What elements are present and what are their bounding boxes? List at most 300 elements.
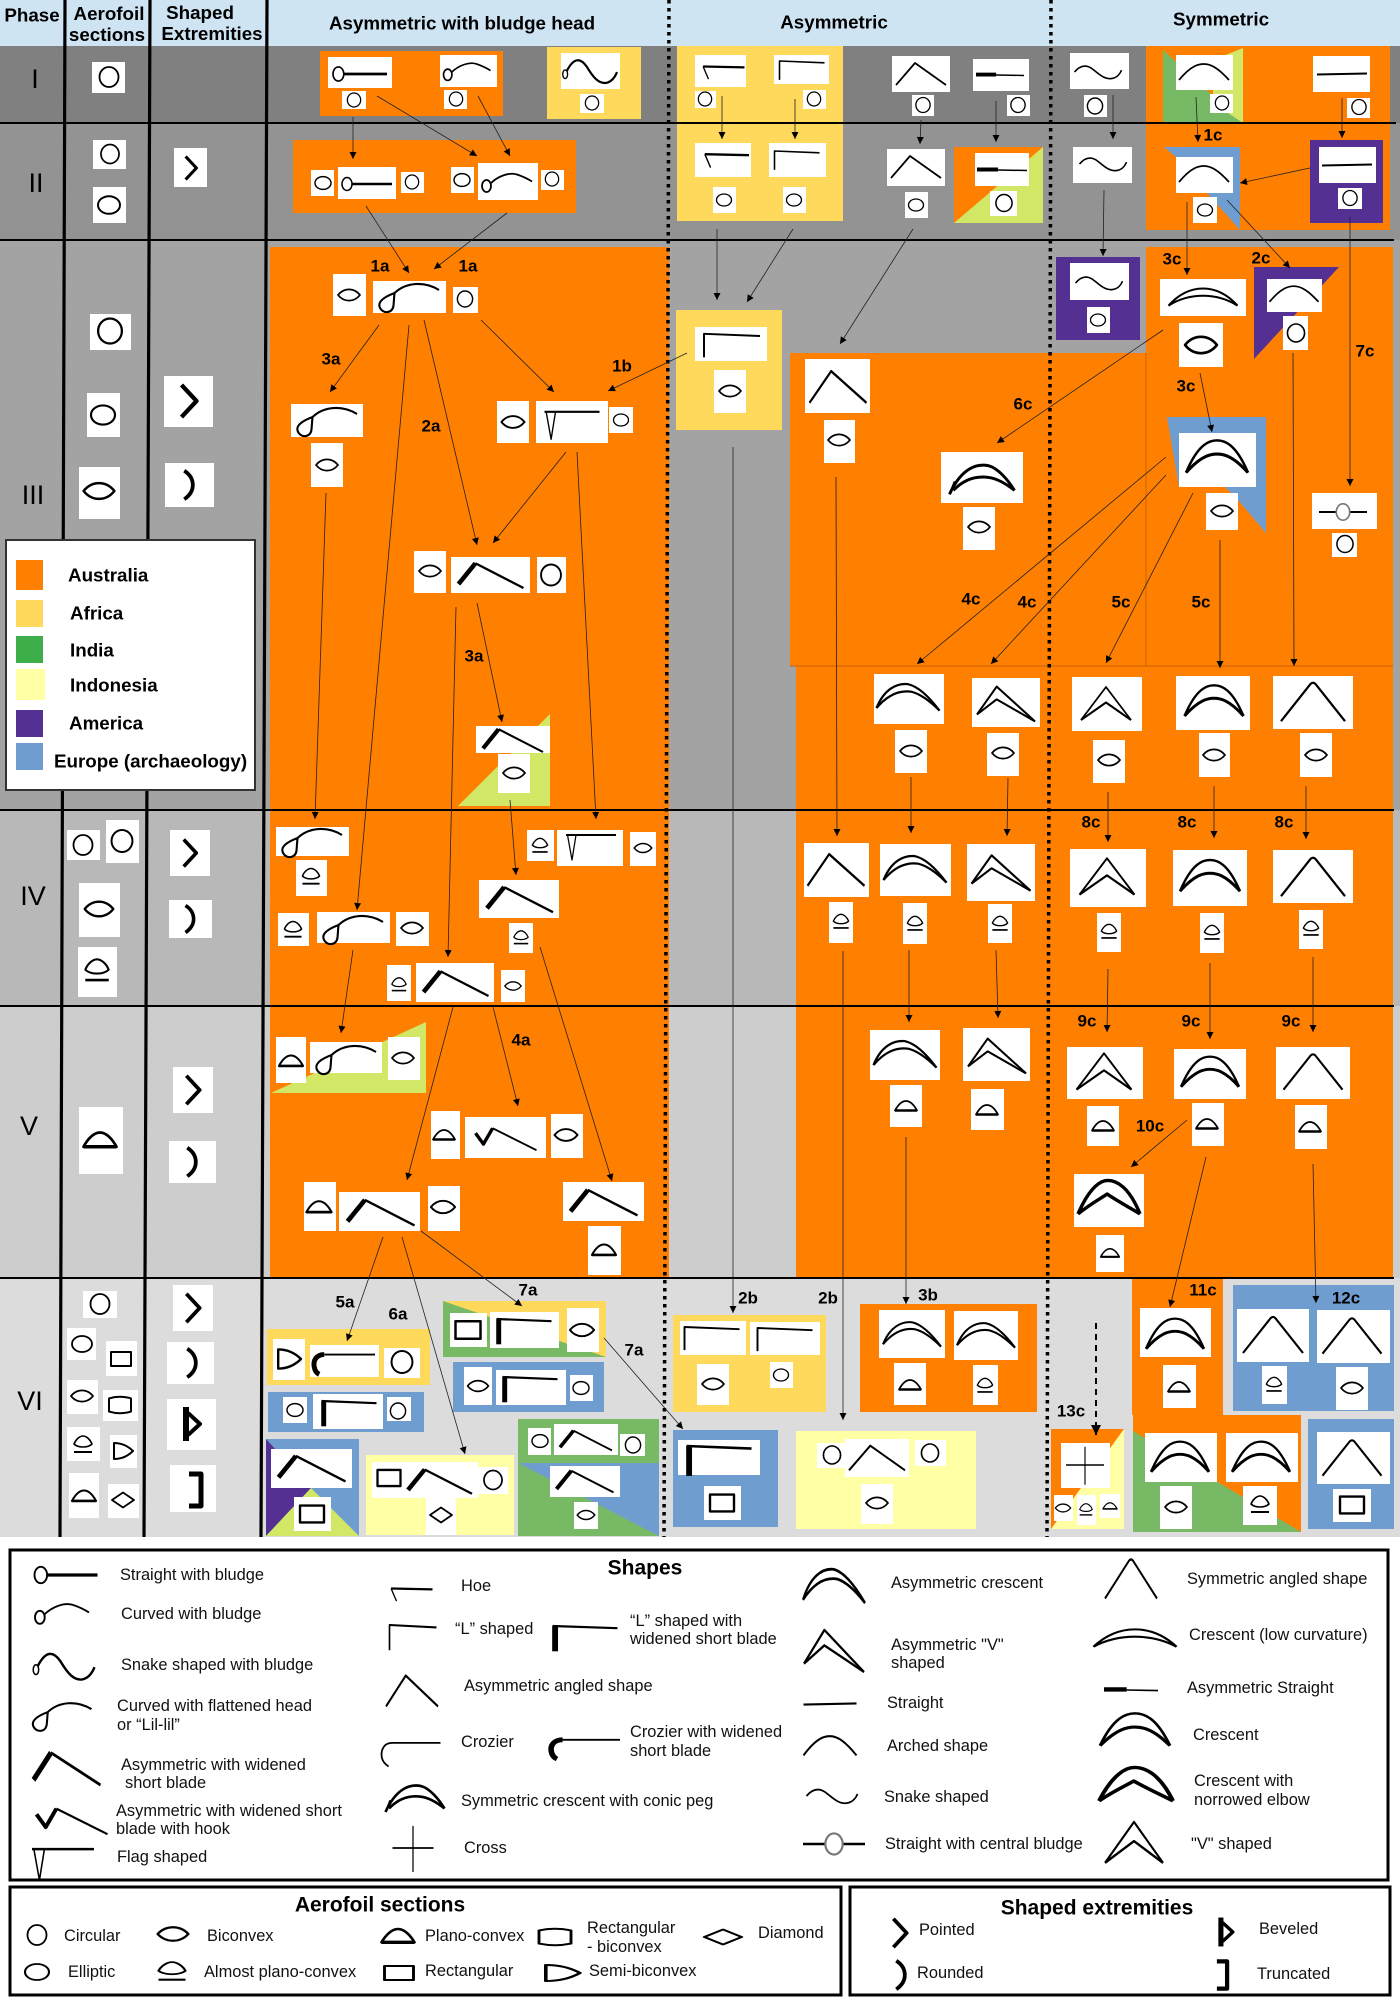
arrow (794, 99, 796, 139)
step label 6c: 6c (1014, 394, 1032, 414)
artefact: asymmetric crescent, phase V (870, 1030, 940, 1127)
artefact: asymmetric widened, phase III (414, 551, 566, 593)
key: symmetric crescent with conic peg: Symmetric crescent with conic peg (461, 1792, 713, 1810)
arrow (341, 950, 353, 1033)
key: V shaped: "V" shaped (1191, 1835, 1272, 1853)
arrow: 3c (1200, 373, 1212, 432)
step label 9c: 9c (1282, 1012, 1300, 1030)
key: circular: Circular (64, 1927, 121, 1945)
arrow: 9c (1107, 969, 1108, 1032)
key: crescent: Crescent (1193, 1726, 1259, 1744)
artefact: L widened, phase VI Europe centre (678, 1440, 760, 1520)
panel: Australia phases III-V, bludge column (270, 247, 669, 1278)
artefact: cross, phase VI (1054, 1443, 1120, 1525)
key: pointed (893, 1919, 975, 1947)
panel: Australia phases I-II, symmetric column (1146, 46, 1390, 230)
panel: Europe, phase VI L widened (268, 1392, 424, 1432)
arrow (478, 96, 510, 156)
artefact: V shaped, phase III (1072, 677, 1142, 783)
key: semi-biconvex: Semi-biconvex (589, 1962, 697, 1980)
heading: Symmetric: Symmetric (1173, 8, 1269, 30)
step label 3a: 3a (465, 646, 484, 666)
artefact: arched, phase III America (1267, 279, 1322, 350)
artefact: lil-lil, phase IV left (276, 827, 349, 896)
step label 3c: 3c (1163, 250, 1181, 268)
key: L shaped with widened short blade: widened short blade (629, 1630, 777, 1648)
artefact: symmetric crescent with conic peg, phase III (941, 452, 1023, 550)
artefact: crescent, phase VI India left (1145, 1433, 1217, 1529)
step label 5c: 5c (1192, 592, 1210, 612)
arrow: 7a (421, 1231, 522, 1306)
shaped extremities, phase IV (169, 830, 212, 938)
legend item: India: India (70, 640, 114, 660)
artefact: snake with bludge, phase I (561, 53, 620, 113)
artefact: asymmetric widened, phase VI Indonesia (372, 1462, 508, 1535)
aerofoil sections, phase I (92, 62, 125, 93)
panel: Australia phases III-V, asymmetric and symmetric columns (790, 247, 1393, 1278)
key: asymmetric V shaped: Asymmetric "V" (891, 1636, 1004, 1654)
step label 1a: 1a (459, 256, 478, 276)
arrow: 7c (1349, 217, 1351, 486)
artefact: asymmetric crescent, phase VI right (954, 1311, 1018, 1405)
key: asymmetric angled shape (386, 1676, 653, 1706)
panel: Europe, phase VI L widened third (673, 1430, 778, 1527)
arrow: 1c (1196, 97, 1198, 142)
panel: Europe, phase VI L widened second (453, 1362, 604, 1412)
artefact: flag, phase III 1b (497, 401, 633, 443)
step label 3c: 3c (1177, 376, 1195, 396)
key: crescent (1100, 1713, 1259, 1746)
artefact: crescent low curvature, phase III (1160, 279, 1246, 367)
key: asymmetric with widened short blade (34, 1753, 306, 1792)
key: crozier (382, 1733, 514, 1767)
row background: phase III (0, 240, 1400, 810)
arrow: 8c (1213, 786, 1215, 838)
arrow: 2c (1227, 200, 1290, 268)
artefact: crescent, phase IV (1173, 850, 1247, 953)
key: curved with bludge (35, 1604, 261, 1624)
panel: Europe, phase III crescent (1167, 417, 1266, 533)
arrow (996, 950, 998, 1018)
artefact: curved with bludge, phase II (451, 163, 564, 200)
arrow: 5c (1106, 493, 1193, 663)
artefact: asymmetric straight, phase II (975, 153, 1029, 216)
arrow (716, 229, 718, 300)
artefact: symmetric angled, phase VI 12c right (1317, 1310, 1390, 1410)
artefact: asymmetric with hook, phase V (431, 1111, 583, 1159)
key: hoe (391, 1577, 491, 1601)
key: crozier with widened short blade: Crozier with widened (630, 1723, 782, 1741)
arrow: 7a (604, 1338, 683, 1429)
artefact: crescent, phase VI India right (1226, 1433, 1298, 1525)
panel: America, phase III arched (1254, 267, 1339, 359)
key: rectangular-biconvex: Rectangular (587, 1919, 676, 1937)
heading: Asymmetric: Asymmetric (780, 12, 888, 32)
row background: phase II (0, 123, 1400, 240)
artefact: lil-lil, phase III 1a (333, 274, 478, 316)
phase label VI: VI (17, 1386, 43, 1416)
shaped extremities, phase II (174, 148, 207, 187)
key: crozier with widened short blade (551, 1723, 782, 1760)
key: rectangular (384, 1962, 514, 1980)
artefact: asymmetric V, phase IV (967, 844, 1035, 943)
panel: lime, phase III angled (458, 714, 550, 806)
arrow (1240, 168, 1310, 183)
key: snake shaped (806, 1788, 989, 1806)
key: rounded: Rounded (917, 1964, 984, 1982)
step label 3a: 3a (322, 350, 341, 368)
key: asymmetric angled shape: Asymmetric angled shape (464, 1677, 653, 1695)
key: curved with bludge: Curved with bludge (121, 1605, 261, 1623)
artefact: curved with bludge, phase I (440, 55, 497, 109)
artefact: asymmetric V, phase III (972, 678, 1040, 776)
artefact: asymmetric widened, phase IV right (479, 880, 559, 953)
step label 8c: 8c (1275, 812, 1293, 832)
legend item: Australia: Australia (68, 564, 149, 586)
artefact: asymmetric straight, phase I (973, 59, 1030, 116)
arrow: 2a (357, 325, 409, 910)
artefact: L shaped, phase III Africa (695, 327, 767, 413)
key: asymmetric V shaped: shaped (891, 1654, 945, 1672)
key: rectangular-biconvex (539, 1919, 676, 1956)
arrow: 1a (434, 213, 507, 269)
key: beveled (1221, 1918, 1318, 1946)
artefact: symmetric angled, phase V (1276, 1047, 1350, 1149)
arrow: 8c (1107, 792, 1109, 842)
legend: regions (6, 540, 255, 790)
artefact: V shaped, phase V (1067, 1047, 1143, 1146)
arrow: 3a (330, 325, 379, 392)
arrow: 6c (997, 330, 1163, 443)
arrow: 12c (1313, 1164, 1316, 1303)
artefact: snake, phase II (1073, 147, 1132, 183)
key: rectangular-biconvex: - biconvex (587, 1938, 663, 1956)
arrow (747, 229, 793, 302)
arrow (1112, 95, 1114, 139)
step label 5a: 5a (336, 1292, 355, 1312)
key: diamond (704, 1924, 824, 1944)
step label 2b: 2b (818, 1288, 838, 1308)
arrow (840, 229, 913, 344)
key: curved with flattened head (33, 1697, 312, 1734)
heading: Shaped Extremities: Extremities (161, 22, 263, 44)
arrow: 9c (1209, 963, 1211, 1039)
artefact: crescent, phase III (1176, 676, 1250, 777)
key: symmetric crescent with conic peg (386, 1786, 713, 1812)
artefact: L widened, phase VI Africa-India (450, 1308, 599, 1352)
artefact: L shaped, phase VI Africa left (680, 1321, 746, 1405)
artefact: asymmetric widened, phase VI America-Europe (271, 1449, 352, 1531)
arrow (908, 950, 910, 1022)
key: biconvex: Biconvex (207, 1927, 274, 1945)
panel: Europe, America and lime, phase VI (266, 1439, 359, 1536)
key: elliptic (25, 1963, 115, 1981)
step label 9c: 9c (1078, 1012, 1096, 1030)
arrow: 1a (366, 206, 409, 273)
phase label IV: IV (20, 881, 46, 911)
artefact: asymmetric crescent, phase IV (880, 844, 951, 944)
arrow: 4c (917, 457, 1166, 664)
arrow (836, 477, 837, 836)
artefact: crozier widened, phase VI Africa (273, 1339, 420, 1380)
phase label V: V (20, 1111, 38, 1141)
column divider lines (60, 0, 267, 1537)
arrow (995, 101, 997, 142)
step label 10c: 10c (1136, 1116, 1164, 1136)
panel: Europe, phase VI symmetric angled (1308, 1419, 1394, 1529)
key: curved with flattened head: Curved with flattened head (117, 1697, 312, 1715)
artefact: crescent with narrowed elbow, phase V (1074, 1174, 1144, 1272)
artefact: hoe, phase I (695, 55, 746, 108)
dotted column separators (664, 0, 1051, 1537)
artefact: L widened, phase VI Europe left (283, 1394, 411, 1429)
key panel: Shaped extremities (850, 1887, 1390, 1995)
key: straight with central bludge (803, 1833, 1083, 1855)
step label 4c: 4c (1018, 592, 1036, 612)
artefact: asymmetric V, phase V (963, 1028, 1030, 1130)
arrow (315, 493, 326, 819)
step label 4c: 4c (962, 590, 980, 608)
key: plano-convex: Plano-convex (425, 1927, 525, 1945)
arrow: 4a (493, 1007, 518, 1106)
heading: Shapes: Shapes (608, 1556, 682, 1580)
panel: Africa phases I-II, asymmetric (677, 46, 843, 221)
arrow: 11c (1170, 1157, 1206, 1307)
panel: lime, phase V lil-lil (271, 1022, 426, 1093)
panel: Africa phase I, snake with bludge (547, 47, 641, 119)
key: cross (392, 1826, 507, 1872)
row background: phase IV (0, 810, 1400, 1006)
panel: Africa and India, phase VI L widened (443, 1301, 606, 1357)
shaped extremities, phase VI (167, 1285, 216, 1512)
heading: Phase: Phase (4, 4, 60, 26)
key: arched shape (804, 1736, 988, 1755)
step label 12c: 12c (1332, 1288, 1360, 1308)
step label 3b: 3b (918, 1286, 938, 1304)
artefact: arched, phase II (1176, 157, 1233, 223)
panel: India and lime, phase I arched (1163, 48, 1243, 123)
step label 5c: 5c (1112, 592, 1130, 612)
panel: Indonesia, phase VI asymmetric angled (796, 1431, 976, 1529)
panel: Australia and Indonesia-lime, phase II asymmetric straight (954, 147, 1043, 223)
artefact: asymmetric widened, phase IV bottom (387, 963, 525, 1002)
arrow (721, 96, 723, 139)
aerofoil sections, phase VI (67, 1291, 139, 1518)
key: L shaped: “L” shaped (455, 1620, 533, 1638)
step label 6a: 6a (389, 1304, 408, 1324)
arrow: 1b (608, 353, 687, 391)
key: straight: Straight (887, 1694, 944, 1712)
key: crescent with narrowed elbow (1099, 1767, 1310, 1809)
arrow (577, 452, 596, 819)
key: rounded (896, 1961, 984, 1989)
key: crozier: Crozier (461, 1733, 514, 1751)
arrow (1007, 778, 1008, 836)
arrow: 2b (842, 951, 844, 1420)
legend item: America (16, 710, 144, 737)
artefact: straight, phase I (1313, 56, 1370, 118)
artefact: asymmetric widened, phase V left (304, 1182, 460, 1231)
step label 7a: 7a (519, 1280, 538, 1300)
arrow (510, 800, 516, 875)
artefact: straight with bludge, phase I (328, 57, 392, 109)
key: truncated: Truncated (1257, 1965, 1330, 1983)
key: symmetric angled shape (1105, 1560, 1367, 1598)
artefact: crescent, phase V (1174, 1049, 1246, 1146)
artefact: asymmetric widened, phase V right (563, 1182, 644, 1275)
arrow: 6a (402, 1237, 465, 1454)
arrow (481, 320, 554, 392)
row background: phase VI (0, 1278, 1400, 1537)
key: crescent low curvature (1094, 1626, 1368, 1647)
arrow (407, 1007, 453, 1180)
legend item: Indonesia: Indonesia (70, 674, 158, 696)
arrow: 3a (477, 603, 502, 722)
key: L shaped (390, 1620, 533, 1650)
key: arched shape: Arched shape (887, 1737, 988, 1755)
artefact: straight, phase II (1319, 147, 1376, 209)
arrow (1341, 98, 1343, 138)
key: plano-convex (382, 1927, 525, 1945)
artefact: snake, phase I (1070, 53, 1129, 117)
artefact: straight with central bludge, phase III (1312, 493, 1377, 557)
artefact: asymmetric crescent, phase VI left (879, 1310, 945, 1405)
panel: America, phase II straight (1310, 140, 1383, 223)
row background: phase I (0, 46, 1400, 123)
key: asymmetric with widened short blade with hook (36, 1802, 342, 1838)
key: crescent with narrowed elbow: Crescent with (1194, 1772, 1293, 1790)
key: asymmetric crescent: Asymmetric crescent (891, 1574, 1044, 1592)
arrow (493, 452, 566, 543)
heading: Aerofoil sections: Aerofoil (74, 2, 144, 24)
faint seam lines (790, 353, 1393, 666)
artefact: L shaped, phase I (774, 55, 829, 109)
arrow: 9c (1312, 957, 1314, 1032)
artefact: lil-lil, phase III 3a (291, 404, 363, 487)
key panel: Aerofoil sections (10, 1887, 841, 1995)
artefact: asymmetric angled, phase II (887, 149, 945, 218)
shaped extremities, phase III (164, 376, 214, 507)
key: semi-biconvex (546, 1962, 697, 1981)
key: crescent low curvature: Crescent (low curvature) (1189, 1626, 1368, 1644)
arrow: 10c (1131, 1120, 1187, 1167)
key: almost plano-convex: Almost plano-convex (204, 1963, 357, 1981)
aerofoil sections, phase V (79, 1107, 123, 1174)
key: biconvex (158, 1927, 274, 1945)
key: snake shaped: Snake shaped (884, 1788, 989, 1806)
step label 11c: 11c (1189, 1280, 1217, 1300)
panel: Indonesia, phase VI angled (366, 1455, 514, 1535)
key: crescent with narrowed elbow: norrowed elbow (1194, 1791, 1310, 1809)
key: asymmetric straight: Asymmetric Straight (1187, 1679, 1334, 1697)
key: L shaped with widened short blade: “L” shaped with (630, 1612, 742, 1630)
key: circular (28, 1925, 121, 1945)
panel: Australia, phase VI asymmetric crescents (860, 1304, 1037, 1412)
artefact: asymmetric angled, phase VI Indonesia (817, 1439, 946, 1524)
key: crozier with widened short blade: short blade (630, 1742, 711, 1760)
panel: Australia and India, phase VI crescents (1133, 1415, 1301, 1532)
aerofoil sections, phase II (93, 140, 126, 223)
legend item: Europe (archaeology) (16, 743, 247, 772)
step label 9c: 9c (1182, 1012, 1200, 1030)
panel: Africa, phase VI L shaped (673, 1315, 826, 1412)
step label 8c: 8c (1178, 812, 1196, 832)
key: symmetric angled shape: Symmetric angled shape (1187, 1570, 1367, 1588)
step label 7a: 7a (625, 1340, 644, 1360)
artefact: L shaped, phase VI Africa right (750, 1322, 820, 1388)
arrow: 13c dashed (1095, 1323, 1097, 1435)
arrow (448, 607, 456, 957)
heading: Aerofoil sections: Aerofoil sections (295, 1894, 465, 1916)
step label 13c: 13c (1057, 1402, 1085, 1420)
key: diamond: Diamond (758, 1924, 824, 1942)
artefact: asymmetric widened, phase III lime (476, 726, 550, 793)
arrow (424, 320, 477, 545)
legend item: America: America (69, 712, 144, 734)
arrow: 4c (991, 475, 1166, 664)
key: asymmetric crescent (803, 1569, 1044, 1603)
panel: Africa, phase III L shaped (676, 310, 782, 430)
phase row lines (0, 123, 1396, 1278)
panel: Australia phase II, bludge (293, 140, 576, 213)
arrow: 3c (1186, 202, 1188, 275)
header band (0, 0, 1400, 46)
aerofoil sections, phase III (79, 314, 131, 519)
legend item: Indonesia (16, 669, 158, 700)
arrow (920, 120, 921, 144)
heading: Aerofoil sections: sections (69, 24, 145, 44)
artefact: L shaped, phase II (769, 143, 826, 213)
step label 2b: 2b (738, 1288, 758, 1308)
key: asymmetric with widened short blade: short blade (125, 1774, 206, 1792)
key: asymmetric with widened short blade with hook: Asymmetric with widened short (116, 1802, 342, 1820)
artefact: asymmetric angled, phase IV (804, 843, 869, 943)
key: elliptic: Elliptic (68, 1963, 115, 1981)
key: asymmetric V shaped (804, 1630, 1004, 1672)
panel: America, phase III snake (1056, 257, 1140, 340)
panel: Australia and Indonesia, phase VI cross (1051, 1429, 1124, 1529)
artefact: snake, phase III America (1070, 263, 1129, 333)
key panel: Shapes (10, 1550, 1388, 1880)
phase label I: I (31, 64, 39, 94)
artefact: asymmetric angled, phase III (805, 359, 870, 463)
legend item: Africa (16, 600, 124, 627)
artefact: asymmetric angled, phase I (892, 56, 950, 116)
arrow (1103, 190, 1104, 256)
key: truncated (1217, 1961, 1330, 1989)
key: pointed: Pointed (919, 1921, 975, 1939)
artefact: L widened, phase VI Europe right (464, 1367, 593, 1405)
legend item: Australia (16, 560, 149, 590)
artefact: crescent, phase VI 11c (1140, 1308, 1211, 1408)
key: straight with central bludge: Straight with central bludge (885, 1835, 1083, 1853)
artefact: V shaped, phase IV (1070, 849, 1146, 952)
step label 2a: 2a (422, 416, 441, 436)
arrow: 8c (1305, 786, 1307, 839)
panel: India and Europe, phase VI (518, 1419, 659, 1536)
key: cross: Cross (464, 1839, 507, 1857)
artefact: straight with bludge, phase II (311, 167, 424, 199)
artefact: asymmetric crescent, phase III (874, 674, 944, 773)
aerofoil sections, phase IV (67, 820, 139, 997)
step label 1a: 1a (371, 256, 390, 276)
step label 1b: 1b (612, 356, 632, 376)
step label 8c: 8c (1082, 812, 1100, 832)
key: curved with flattened head: or “Lil-lil” (117, 1716, 180, 1734)
key: L shaped with widened short blade (552, 1612, 777, 1651)
artefact: symmetric angled, phase III (1273, 676, 1353, 777)
panel: Europe, phase VI 12c (1233, 1285, 1394, 1411)
